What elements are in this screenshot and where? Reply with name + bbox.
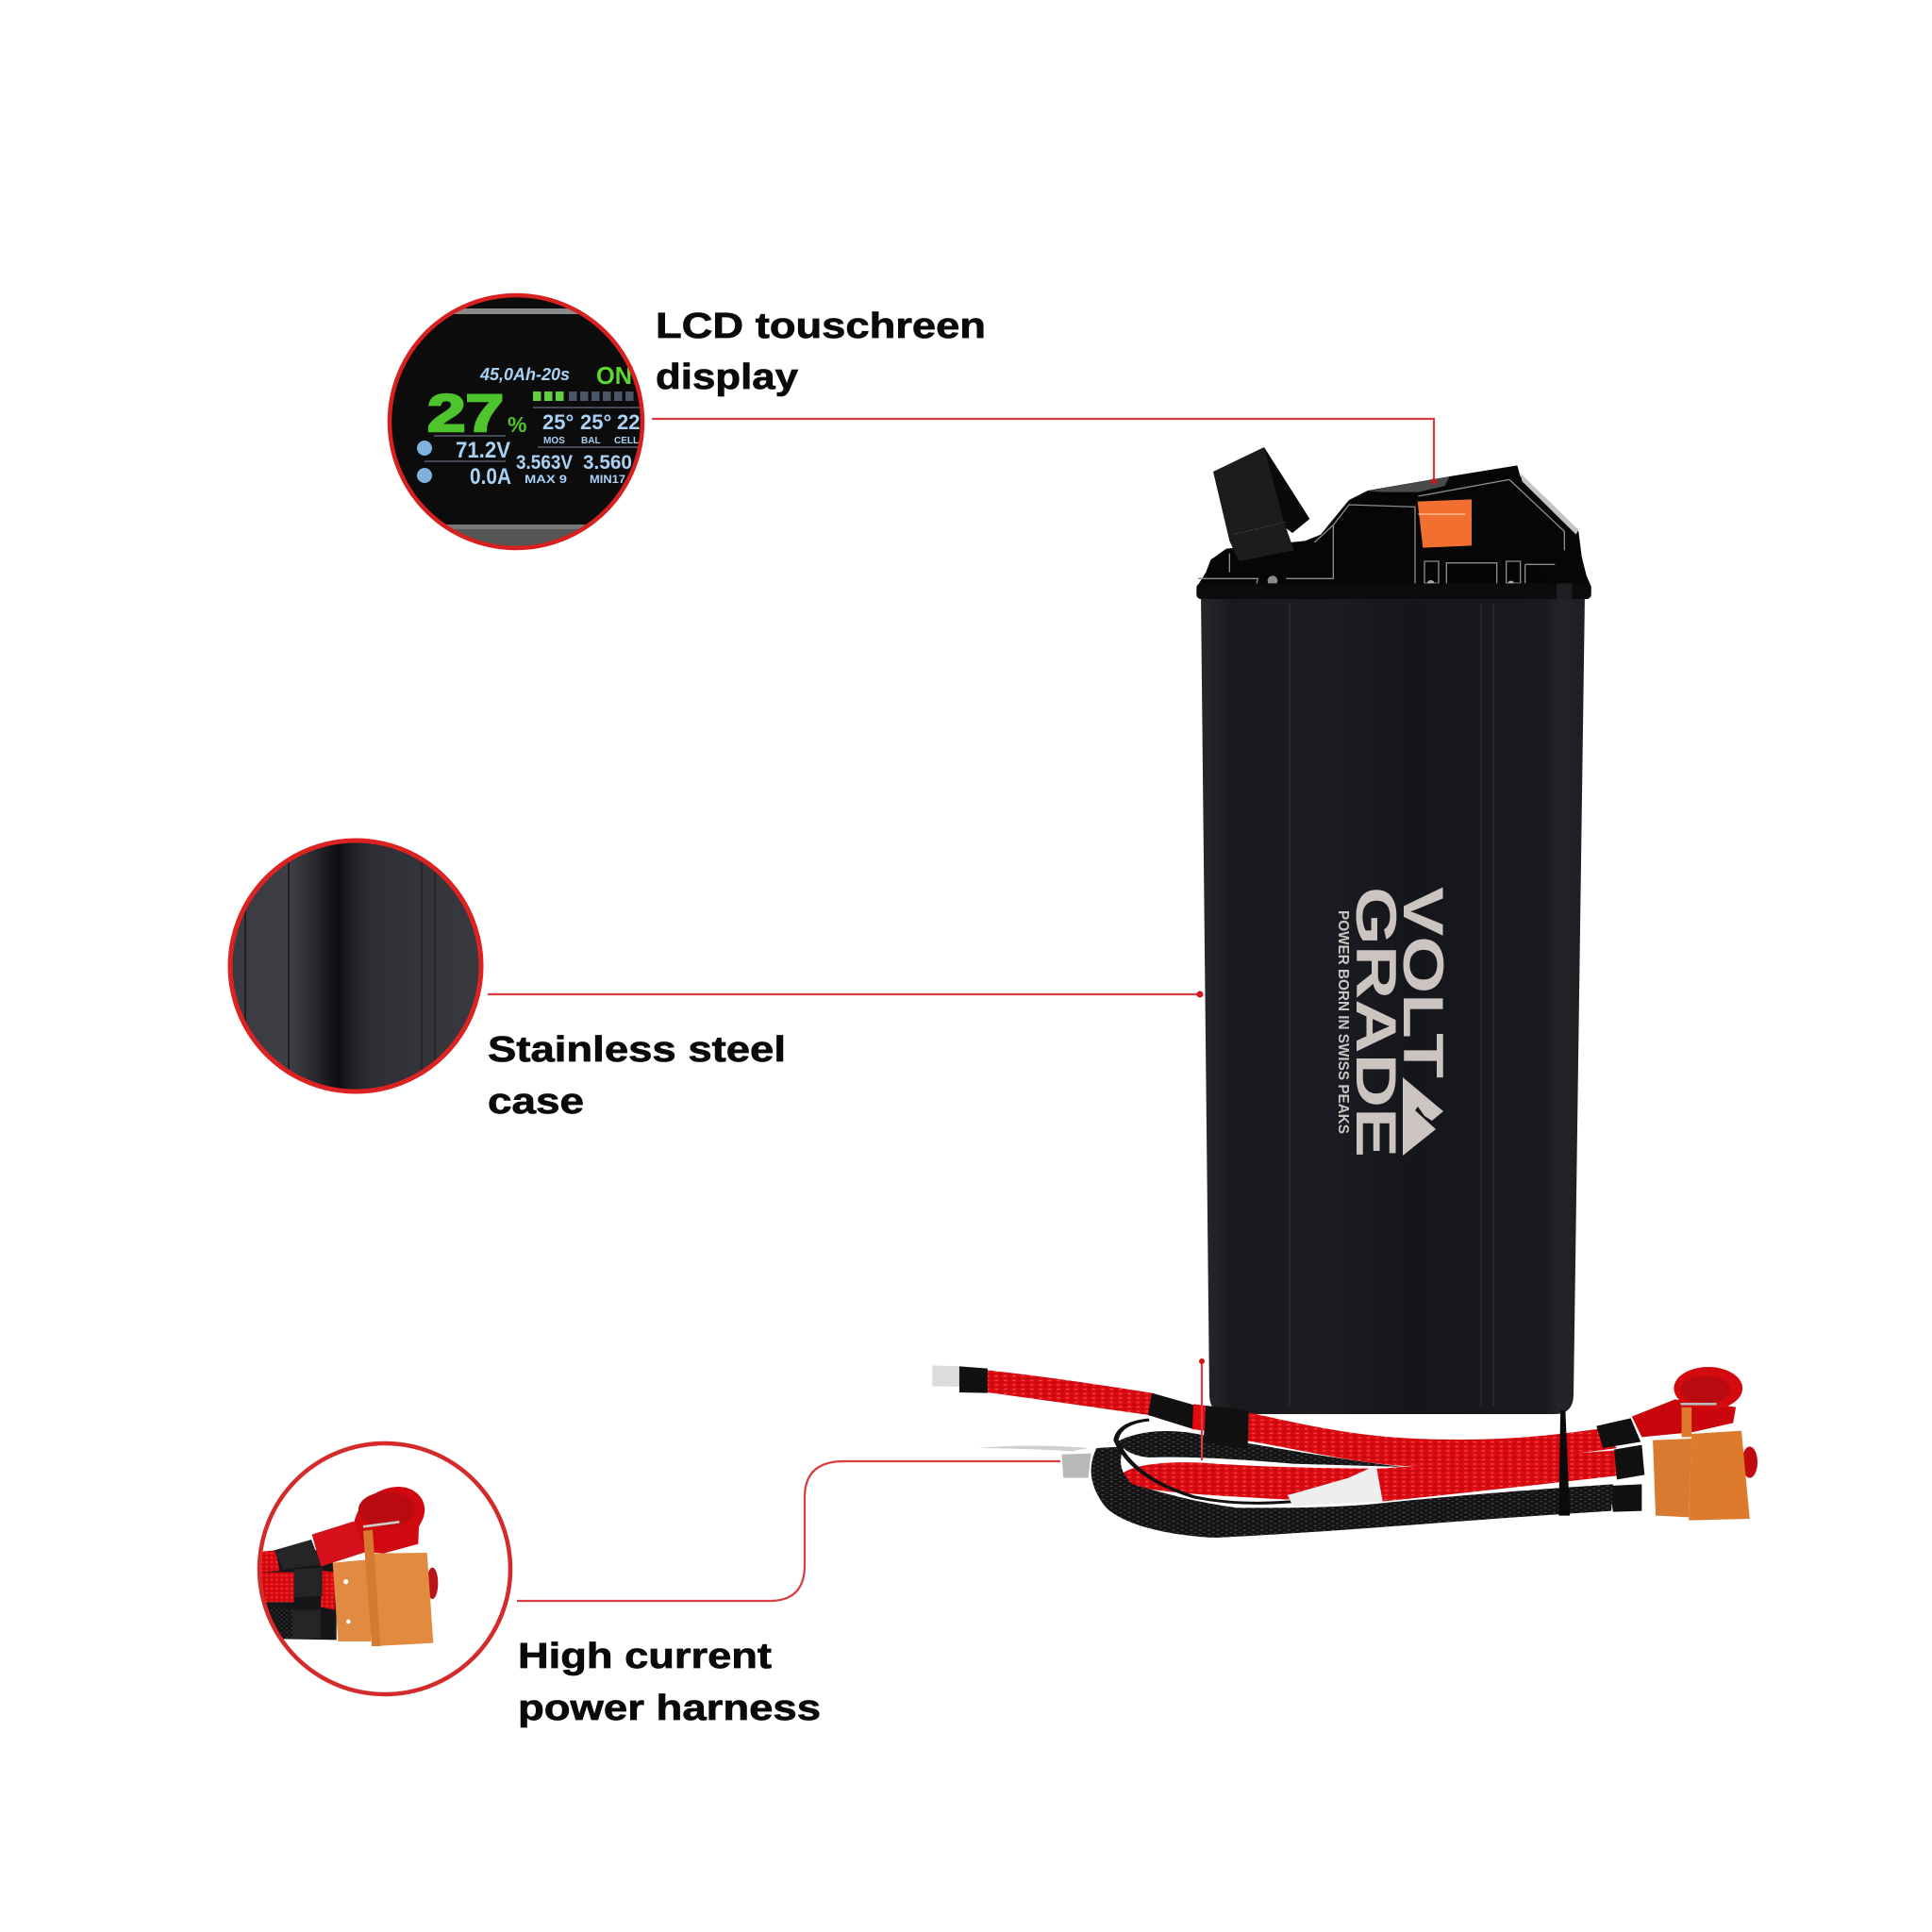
screen readouts (417, 361, 641, 490)
panel: LCD display detail circle (377, 294, 660, 549)
rim (1196, 583, 1591, 599)
screen readouts: 25° (542, 410, 574, 434)
red cable lower (1123, 1450, 1620, 1502)
screen readouts: 45,0Ah-20s (479, 365, 570, 384)
upper metal tip (932, 1365, 961, 1387)
logo: VOLT GRADE: GRADE (1344, 887, 1407, 1158)
screen readouts: MIN17 (590, 473, 625, 486)
red cable upper (980, 1370, 1152, 1415)
heading: LCD touchscreen label: LCD touschreen (656, 307, 986, 346)
black braid lower (1091, 1446, 1613, 1538)
screen readouts: MOS (543, 436, 565, 446)
screen readouts: 27 (427, 383, 504, 442)
logo: VOLT GRADE (1335, 887, 1455, 1158)
panel: power harness circle (258, 1443, 510, 1694)
screen readouts: BAL (581, 436, 601, 446)
callout line: display (652, 419, 1437, 484)
screen readouts: MAX 9 (525, 473, 567, 486)
blur streak (977, 1445, 1089, 1451)
product: battery (1196, 447, 1591, 1414)
panel: stainless steel case circle (230, 830, 481, 1104)
logo: VOLT GRADE: POWER BORN IN SWISS PEAKS (1335, 910, 1351, 1134)
battery body (1201, 594, 1585, 1414)
heading: case label: Stainless steel (488, 1030, 786, 1070)
lower metal tip (1061, 1454, 1091, 1478)
battery top housing (1196, 447, 1591, 599)
screen readouts: 3.560 (583, 452, 632, 474)
screen readouts: 22 (617, 410, 640, 434)
screen readouts: % (508, 412, 526, 437)
heading: harness label: power harness (518, 1689, 821, 1728)
screen readouts: 25° (580, 410, 611, 434)
heading: harness label (518, 1637, 821, 1728)
heading: harness label: High current (518, 1637, 772, 1676)
heading: LCD touchscreen label: display (656, 358, 798, 397)
screen readouts: CELL (614, 436, 639, 446)
thin wire (1116, 1420, 1293, 1503)
heading: case label: case (488, 1082, 584, 1122)
white connector (1288, 1465, 1383, 1507)
red cap (1632, 1399, 1736, 1437)
callout line: harness (517, 1358, 1205, 1601)
callout line: case (488, 991, 1204, 998)
power harness (932, 1365, 1757, 1538)
heading: LCD touchscreen label (656, 307, 986, 397)
screen readouts: 3.563V (516, 452, 573, 474)
cable sleeves (959, 1366, 1644, 1512)
screen readouts: 0.0A (470, 464, 511, 490)
carry strap (1264, 447, 1309, 533)
heading: case label (488, 1030, 786, 1122)
screen readouts: ON (596, 361, 632, 390)
black braid upper (1119, 1431, 1404, 1467)
logo: VOLT GRADE: VOLT (1391, 887, 1455, 1078)
orange connector (1653, 1439, 1691, 1517)
zip tie (1558, 1410, 1570, 1516)
screen readouts: 71.2V (456, 438, 510, 463)
orange latch (1418, 499, 1472, 548)
